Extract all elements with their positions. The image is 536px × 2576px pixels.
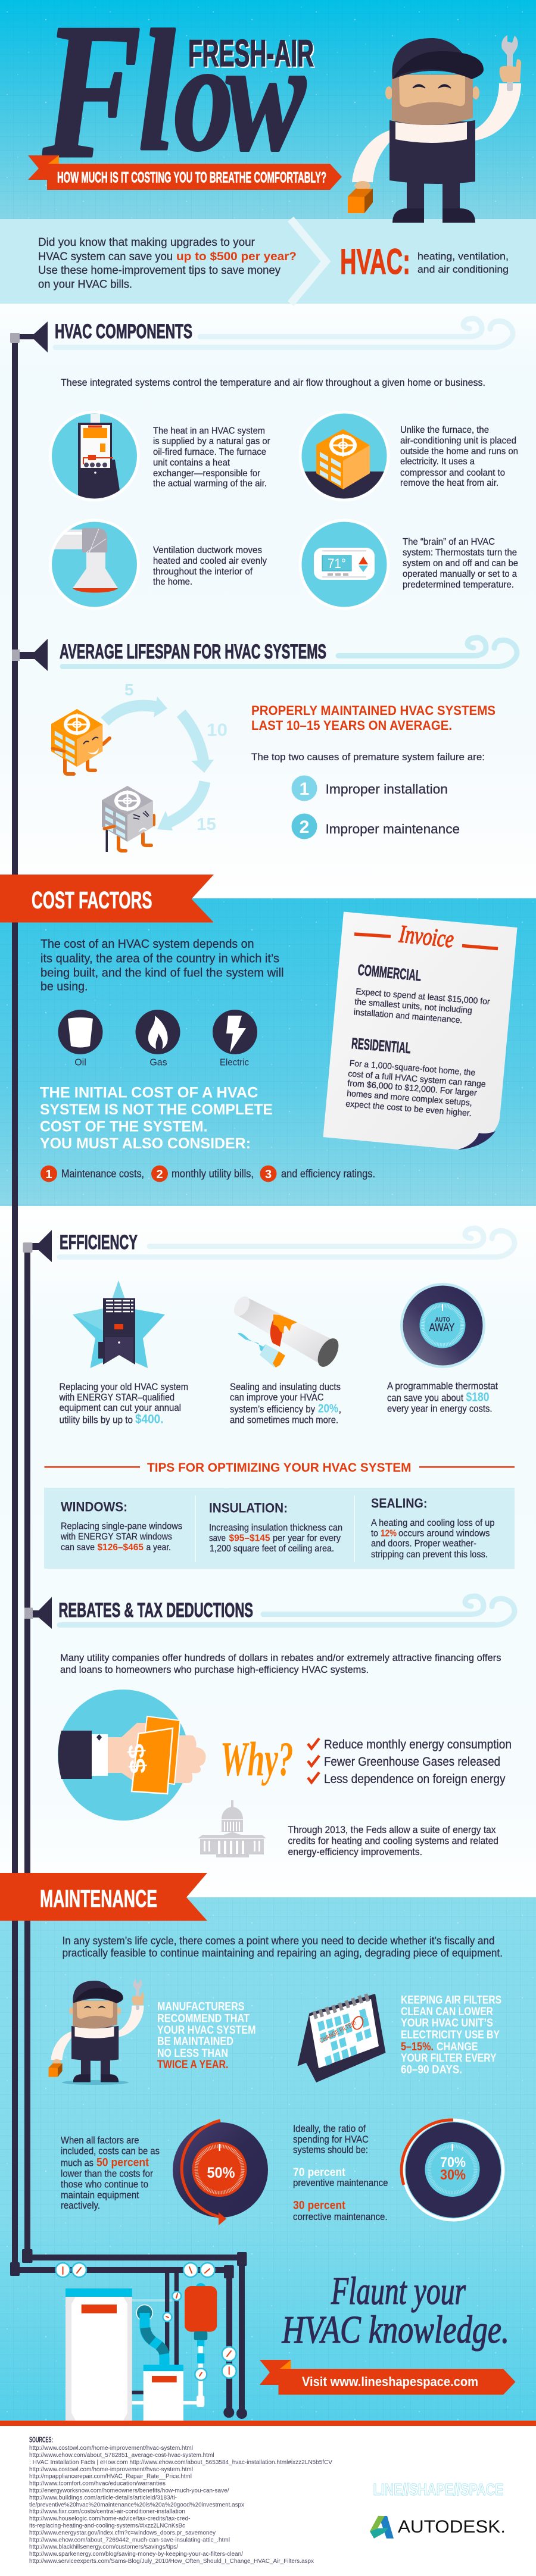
50 percent text: 50 percent bbox=[96, 2156, 149, 2169]
tip: sealing: SEALING: bbox=[371, 1495, 428, 1511]
icon: round thermostat bbox=[400, 1283, 485, 1368]
tip: sealing: and doors. Proper weather- bbox=[371, 1538, 476, 1549]
cost intro text bbox=[40, 938, 283, 993]
component: air conditioner bbox=[300, 412, 518, 500]
cause 2: Improper maintenance bbox=[325, 822, 460, 836]
HVAC definition: heating, ventilation, bbox=[417, 251, 509, 262]
title: Flow: o bbox=[174, 11, 233, 183]
section heading: rebates and tax deductions: REBATES & TAX DEDUCTIONS bbox=[58, 1599, 253, 1622]
text: unit contains a heat bbox=[153, 458, 230, 468]
text: , bbox=[338, 1404, 341, 1415]
text bbox=[153, 426, 270, 489]
blue hose bbox=[136, 2305, 164, 2365]
intro text: HVAC system can save you bbox=[38, 251, 173, 263]
50 percent text: reactively. bbox=[61, 2200, 100, 2211]
section heading: rebates and tax deductions bbox=[24, 1596, 515, 1629]
hero panel bbox=[0, 0, 536, 219]
section heading: HVAC components: HVAC COMPONENTS bbox=[55, 320, 192, 343]
invoice paper: homes and more complex setups, bbox=[347, 1089, 472, 1108]
big statement bbox=[40, 1085, 273, 1152]
icon: energy star furnace bbox=[73, 1281, 165, 1368]
numbers bbox=[124, 680, 228, 834]
icon: oil: Oil bbox=[74, 1057, 86, 1068]
tip: windows: a year. bbox=[147, 1543, 171, 1553]
tip: insulation: save bbox=[209, 1534, 226, 1543]
text bbox=[400, 425, 518, 488]
wind swirl bbox=[63, 638, 517, 667]
gauge: 70/30: 70% bbox=[440, 2155, 466, 2171]
tip: insulation: $95–$145 bbox=[229, 1534, 270, 1543]
icon: thermostat bbox=[300, 520, 388, 608]
logo: autodesk: AUTODESK. bbox=[398, 2517, 506, 2537]
ratio text: Ideally, the ratio of bbox=[293, 2123, 366, 2134]
icon: duct and brush bbox=[230, 1294, 343, 1370]
text: predetermined temperature. bbox=[403, 580, 514, 590]
text: system: Thermostats turn the bbox=[403, 548, 517, 558]
tax credit text: credits for heating and cooling systems and related bbox=[288, 1835, 498, 1847]
tax credit text: energy-efficiency improvements. bbox=[288, 1846, 422, 1857]
manufacturers text: TWICE A YEAR. bbox=[157, 2059, 229, 2071]
invoice paper: Expect to spend at least $15,000 for bbox=[356, 987, 490, 1007]
section heading: efficiency: EFFICIENCY bbox=[60, 1231, 138, 1254]
intro text: Did you know that making upgrades to your bbox=[38, 236, 255, 249]
tip: windows: Replacing single-pane windows bbox=[61, 1522, 182, 1531]
invoice paper: RESIDENTIAL bbox=[351, 1034, 412, 1057]
invoice paper: installation and maintenance. bbox=[353, 1008, 463, 1026]
text bbox=[153, 545, 267, 587]
text: oil-fired furnace. The furnace bbox=[153, 447, 266, 457]
air filter text: KEEPING AIR FILTERS bbox=[401, 1994, 501, 2006]
intro panel bbox=[0, 219, 536, 304]
air filter text: YOUR HVAC UNIT’S bbox=[401, 2017, 493, 2029]
ratio text: 70 percent bbox=[293, 2166, 346, 2179]
cost intro text: its quality, the area of the country in which it’s bbox=[40, 953, 279, 966]
50 percent text: lower than the costs for bbox=[61, 2168, 153, 2179]
tip: insulation bbox=[209, 1500, 342, 1554]
tip: windows bbox=[60, 1499, 182, 1553]
rebates intro text: Many utility companies offer hundreds of dollars in rebates and/or extremely attractive financing offers bbox=[60, 1652, 501, 1663]
section heading: average lifespan bbox=[12, 638, 517, 671]
manufacturers text: BE MAINTAINED bbox=[157, 2035, 233, 2048]
cost intro text: be using. bbox=[40, 980, 88, 993]
HVAC definition: and air conditioning bbox=[417, 264, 509, 275]
considerations list: Maintenance costs, bbox=[61, 1168, 144, 1180]
gauge needles bbox=[63, 2267, 231, 2376]
icon: capitol building bbox=[198, 1800, 266, 1857]
pipe system illustration bbox=[10, 2249, 247, 2421]
tips heading: TIPS FOR OPTIMIZING YOUR HVAC SYSTEM bbox=[147, 1461, 411, 1475]
cause 1 bbox=[292, 775, 448, 801]
lifespan key message: PROPERLY MAINTAINED HVAC SYSTEMS bbox=[251, 703, 496, 718]
icon: happy unit bbox=[51, 709, 110, 774]
tip: insulation: per year for every bbox=[273, 1534, 341, 1543]
maintenance intro text bbox=[62, 1935, 503, 1959]
sources: http://www.energystar.gov/index.cfm?c=windows_doors.pr_savemoney bbox=[29, 2530, 216, 2536]
maintenance intro text: practically feasible to continue maintaining and repairing an aging, degrading piece of equipment. bbox=[62, 1947, 503, 1959]
pipes bbox=[12, 343, 30, 2263]
air filter text: 5–15%. bbox=[401, 2041, 434, 2053]
air filter text: 60–90 DAYS. bbox=[401, 2063, 462, 2077]
considerations list: 1 bbox=[45, 1168, 52, 1181]
title: Flow: w bbox=[226, 11, 306, 183]
manufacturers text: NO LESS THAN bbox=[157, 2047, 228, 2060]
text: Replacing your old HVAC system bbox=[60, 1382, 188, 1392]
50 percent text: much as bbox=[61, 2157, 94, 2168]
big statement: COST OF THE SYSTEM. bbox=[40, 1118, 207, 1135]
sources: http://energyworksnow.com/homeowners/benefits/how-much-you-can-save/ bbox=[29, 2487, 229, 2494]
manufacturers text: MANUFACTURERS bbox=[157, 2000, 244, 2013]
text: operated manually or set to a bbox=[403, 569, 517, 579]
icon: oil bbox=[58, 1010, 102, 1068]
sources: http://www.blackhillsenergy.com/customers/savings/tips/ bbox=[29, 2544, 178, 2550]
text: utility bills by up to bbox=[60, 1415, 133, 1425]
banner: cost factors: COST FACTORS bbox=[32, 887, 152, 913]
intro text: on your HVAC bills. bbox=[38, 279, 132, 291]
icon: old unit bbox=[102, 786, 154, 852]
tip: sealing: stripping can prevent this loss. bbox=[371, 1550, 488, 1560]
tip: windows: can save bbox=[61, 1543, 95, 1553]
worker illustration bbox=[348, 35, 521, 223]
lifespan cycle diagram bbox=[51, 680, 228, 852]
tank: left bbox=[66, 2288, 132, 2421]
sources: its-replacing-heating-and-cooling-systems/#ixzz2LNCnKsBc bbox=[29, 2523, 185, 2529]
ribbon: subtitle: HOW MUCH IS IT COSTING YOU TO BREATHE COMFORTABLY? bbox=[57, 169, 326, 186]
text: A programmable thermostat bbox=[387, 1381, 498, 1392]
cause 2: 2 bbox=[300, 817, 309, 837]
invoice paper: cost of a full HVAC system can range bbox=[348, 1069, 486, 1089]
text: equipment can cut your annual bbox=[60, 1403, 181, 1413]
text: Unlike the furnace, the bbox=[400, 425, 489, 435]
benefits checklist: Fewer Greenhouse Gases released bbox=[324, 1755, 500, 1769]
maintenance intro text: In any system’s life cycle, there comes a point where you need to decide whether it’s fiscally and bbox=[62, 1935, 494, 1947]
sources: tle/preventive%20hvac%20maintenance%20is%20a%20good%20investment.aspx bbox=[29, 2502, 244, 2509]
cost factors panel bbox=[0, 875, 536, 1206]
sources: : HVAC Installation Facts | eHow.com http://www.ehow.com/about_5653584_hvac-installation.html#ixzz2LN5b5fCV bbox=[29, 2459, 332, 2466]
banner: maintenance: MAINTENANCE bbox=[40, 1885, 157, 1912]
icon: round thermostat: AWAY bbox=[429, 1322, 455, 1334]
text: throughout the interior of bbox=[153, 567, 253, 577]
invoice paper: the smallest units, not including bbox=[354, 997, 472, 1016]
air filter text: YOUR FILTER EVERY bbox=[401, 2052, 497, 2065]
sources: http://www.ehow.com/about_7269442_much-can-save-insulating-attic_.html bbox=[29, 2537, 230, 2543]
50 percent text: included, costs can be as bbox=[61, 2146, 160, 2156]
title: Fresh-Air: FRESH-AIR bbox=[188, 33, 314, 74]
illustration: hand with money: $$ bbox=[124, 1743, 151, 1775]
text bbox=[387, 1381, 498, 1415]
lifespan key message: LAST 10–15 YEARS ON AVERAGE. bbox=[251, 718, 452, 733]
why? lettering: Why? bbox=[220, 1732, 293, 1786]
wind swirl bbox=[60, 1596, 515, 1625]
50 percent text: maintain equipment bbox=[61, 2190, 139, 2200]
text: $400. bbox=[135, 1412, 163, 1426]
rebates intro text bbox=[60, 1652, 501, 1675]
text: The “brain” of an HVAC bbox=[403, 537, 495, 547]
ratio text bbox=[293, 2123, 388, 2222]
banner: maintenance bbox=[0, 1873, 207, 1921]
tips panel bbox=[44, 1488, 515, 1569]
vent horn bbox=[12, 639, 48, 671]
HVAC definition bbox=[340, 242, 509, 282]
text: Ventilation ductwork moves bbox=[153, 545, 262, 555]
manufacturers text: RECOMMEND THAT bbox=[157, 2012, 250, 2025]
invoice paper: expect the cost to be even higher. bbox=[345, 1100, 472, 1119]
HVAC definition: HVAC: bbox=[340, 242, 410, 282]
tip: sealing bbox=[371, 1495, 495, 1560]
big statement: SYSTEM IS NOT THE COMPLETE bbox=[40, 1101, 273, 1118]
cost intro text: being built, and the kind of fuel the system will bbox=[40, 967, 283, 980]
considerations list: and efficiency ratings. bbox=[281, 1168, 375, 1180]
vent horn bbox=[10, 321, 48, 352]
text: electricity. It uses a bbox=[400, 457, 475, 467]
tax credit text: Through 2013, the Feds allow a suite of energy tax bbox=[288, 1824, 496, 1835]
icon: furnace bbox=[50, 412, 138, 500]
small worker with shadow bbox=[48, 1979, 144, 2085]
ribbon: visit website: Visit www.lineshapespace.com bbox=[302, 2374, 478, 2389]
50 percent text bbox=[61, 2135, 160, 2211]
icon: electric bbox=[213, 1010, 257, 1068]
arrows bbox=[105, 697, 214, 830]
text bbox=[403, 537, 518, 590]
logo: autodesk bbox=[370, 2516, 506, 2538]
tip: sealing: occurs around windows bbox=[398, 1529, 490, 1538]
sources: http://www.sparkenergy.com/blog/saving-money-by-keeping-your-ac-filters-clean/ bbox=[29, 2551, 243, 2558]
wind swirl bbox=[55, 319, 513, 348]
text: exchanger—responsible for bbox=[153, 469, 261, 479]
cost intro text: The cost of an HVAC system depends on bbox=[40, 938, 254, 951]
text: and sometimes much more. bbox=[230, 1415, 338, 1425]
text: system on and off and can be bbox=[403, 558, 518, 569]
benefits checklist bbox=[308, 1738, 512, 1786]
gauge: 70/30: 30% bbox=[440, 2167, 466, 2183]
considerations list: monthly utility bills, bbox=[172, 1168, 254, 1180]
expansion tank bbox=[185, 2283, 217, 2407]
closing script: Flaunt your bbox=[331, 2269, 466, 2313]
ratio text: 30 percent bbox=[293, 2199, 346, 2212]
gauge: 70/30 bbox=[401, 2120, 503, 2220]
maintenance panel bbox=[0, 1873, 536, 2426]
air filter text: ELECTRICITY USE BY bbox=[401, 2029, 500, 2041]
text: the home. bbox=[153, 577, 192, 587]
rebates intro text: and loans to homeowners who purchase high-efficiency HVAC systems. bbox=[60, 1664, 369, 1675]
banner: cost factors bbox=[0, 875, 214, 923]
sources: http://www.houselogic.com/home-advice/tax-credits/tax-cred- bbox=[29, 2516, 191, 2522]
sources: http://www.buildings.com/article-details/articleid/3183/ti- bbox=[29, 2494, 177, 2502]
text: remove the heat from air. bbox=[400, 478, 498, 488]
air filter text: CLEAN CAN LOWER bbox=[401, 2006, 493, 2018]
50 percent text: When all factors are bbox=[61, 2135, 139, 2146]
sources: http://www.costowl.com/home-improvement/hvac-system.html bbox=[29, 2445, 193, 2452]
closing script bbox=[282, 2269, 509, 2352]
big statement: THE INITIAL COST OF A HVAC bbox=[40, 1085, 258, 1101]
cause 1: Improper installation bbox=[325, 782, 448, 797]
text: Sealing and insulating ducts bbox=[230, 1382, 341, 1392]
vent horn bbox=[23, 1230, 52, 1262]
gauge: 50 percent bbox=[173, 2121, 268, 2225]
tip: windows: WINDOWS: bbox=[61, 1499, 127, 1515]
numbers: 5 bbox=[124, 680, 134, 699]
sources: http://mpappliancerepair.com/HVAC_Repair_Rate__Price.html bbox=[29, 2473, 192, 2480]
invoice paper: Invoice bbox=[397, 920, 455, 954]
tip: insulation: INSULATION: bbox=[209, 1500, 288, 1516]
icon: round thermostat: AUTO bbox=[435, 1316, 450, 1323]
title: Flow: l bbox=[139, 0, 176, 186]
icon: electric: Electric bbox=[220, 1057, 249, 1068]
invoice paper: from $6,000 to $12,000. For larger bbox=[347, 1079, 477, 1098]
lifespan key message: The top two causes of premature system failure are: bbox=[251, 751, 485, 763]
text: every year in energy costs. bbox=[387, 1404, 492, 1415]
air filter text: CHANGE bbox=[437, 2041, 478, 2053]
pipes over panel bbox=[12, 1897, 30, 2263]
considerations list: 3 bbox=[265, 1168, 272, 1181]
text: the actual warming of the air. bbox=[153, 479, 267, 489]
components intro text: These integrated systems control the temperature and air flow throughout a given home or business. bbox=[61, 377, 485, 388]
gauge: 50 percent: 50% bbox=[207, 2165, 235, 2181]
dark pipes bbox=[10, 2249, 247, 2419]
tip: insulation: Increasing insulation thickness can bbox=[209, 1523, 342, 1533]
component: ductwork bbox=[50, 520, 267, 608]
text: $180 bbox=[466, 1391, 490, 1404]
invoice paper: For a 1,000-square-foot home, the bbox=[349, 1059, 476, 1078]
text bbox=[59, 1382, 188, 1426]
tip: windows: with ENERGY STAR windows bbox=[60, 1532, 172, 1542]
text: can save you about bbox=[387, 1393, 463, 1404]
lifespan key message bbox=[251, 703, 496, 763]
manufacturers text: YOUR HVAC SYSTEM bbox=[157, 2024, 256, 2037]
tip: insulation: 1,200 square feet of ceiling area. bbox=[210, 1544, 334, 1554]
sources: http://www.fixr.com/costs/central-air-conditioner-installation bbox=[29, 2509, 185, 2515]
efficiency item: duct sealing bbox=[230, 1294, 343, 1425]
text: 20% bbox=[318, 1403, 338, 1416]
icon: calendar: CHANGE FILTER! bbox=[319, 2019, 357, 2045]
manufacturers text bbox=[157, 2000, 256, 2071]
text: compressor and coolant to bbox=[400, 468, 505, 478]
considerations list bbox=[40, 1166, 375, 1182]
ribbon: visit website bbox=[260, 2360, 516, 2394]
efficiency item: furnace star bbox=[59, 1281, 188, 1426]
cause 1: 1 bbox=[300, 779, 309, 799]
text: system’s efficiency by bbox=[230, 1404, 316, 1415]
section heading: efficiency bbox=[23, 1228, 515, 1262]
50 percent text: those who continue to bbox=[61, 2179, 148, 2190]
tax credit text bbox=[288, 1824, 498, 1857]
big statement: YOU MUST ALSO CONSIDER: bbox=[40, 1135, 251, 1152]
text: heated and cooled air evenly bbox=[153, 556, 267, 566]
intro text: up to $500 per year? bbox=[176, 251, 297, 263]
air filter text bbox=[401, 1994, 501, 2077]
icon: thermostat: 71° bbox=[328, 556, 346, 571]
tip: sealing: A heating and cooling loss of up bbox=[371, 1518, 495, 1528]
vent horn bbox=[24, 1597, 52, 1629]
numbers: 10 bbox=[207, 720, 228, 740]
numbers: 15 bbox=[197, 815, 216, 834]
wind swirl bbox=[60, 1228, 515, 1257]
sources: SOURCES: bbox=[29, 2435, 53, 2444]
cause 2 bbox=[292, 813, 460, 839]
text: with ENERGY STAR–qualified bbox=[59, 1392, 174, 1403]
ratio text: preventive maintenance bbox=[293, 2177, 388, 2188]
ratio text: systems should be: bbox=[293, 2144, 368, 2155]
text: can improve your HVAC bbox=[230, 1392, 324, 1403]
text: air-conditioning unit is placed bbox=[400, 436, 516, 446]
efficiency item: programmable thermostat bbox=[387, 1283, 498, 1415]
icon: duct bbox=[50, 520, 138, 608]
invoice paper: COMMERCIAL bbox=[357, 961, 422, 985]
icon: gas: Gas bbox=[149, 1057, 167, 1068]
gauges bbox=[56, 2263, 236, 2380]
section heading: HVAC components bbox=[10, 319, 513, 352]
sources: http://www.costowl.com/home-improvement/hvac-system.html bbox=[29, 2466, 193, 2473]
tank: right bbox=[132, 2365, 198, 2421]
sources: http://www.tcomfort.com/hvac/education/warranties bbox=[29, 2480, 166, 2487]
benefits checklist: Reduce monthly energy consumption bbox=[324, 1738, 512, 1751]
icon: gas bbox=[136, 1010, 180, 1068]
illustration: hand with money bbox=[58, 1690, 206, 1821]
text bbox=[230, 1382, 341, 1425]
tip: sealing: 12% bbox=[381, 1529, 397, 1538]
considerations list: 2 bbox=[156, 1168, 163, 1181]
ribbon: subtitle bbox=[28, 155, 342, 190]
ratio text: spending for HVAC bbox=[293, 2134, 369, 2145]
sources bbox=[29, 2435, 332, 2565]
intro text: Use these home-improvement tips to save money bbox=[38, 264, 281, 277]
text: outside the home and runs on bbox=[400, 446, 518, 457]
ratio text: corrective maintenance. bbox=[293, 2211, 387, 2222]
sources: http://www.serviceexperts.com/Sams-Blog/July_2010/How_Often_Should_I_Change_HVAC_Air_Filters.aspx bbox=[29, 2558, 314, 2565]
component: thermostat bbox=[300, 520, 518, 608]
intro text bbox=[38, 236, 297, 291]
tip: sealing: to bbox=[371, 1529, 378, 1538]
sources: http://www.ehow.com/about_5782851_average-cost-hvac-system.html bbox=[29, 2452, 214, 2459]
section heading: average lifespan: AVERAGE LIFESPAN FOR HVAC SYSTEMS bbox=[60, 641, 326, 663]
component: furnace bbox=[50, 412, 270, 500]
invoice paper bbox=[323, 912, 517, 1150]
icon: calendar bbox=[298, 1993, 386, 2082]
benefits checklist: Less dependence on foreign energy bbox=[324, 1772, 506, 1786]
icon: AC unit bbox=[300, 412, 388, 500]
text: The heat in an HVAC system bbox=[153, 426, 265, 436]
text: is supplied by a natural gas or bbox=[153, 436, 270, 446]
tip: windows: $126–$465 bbox=[98, 1543, 144, 1553]
